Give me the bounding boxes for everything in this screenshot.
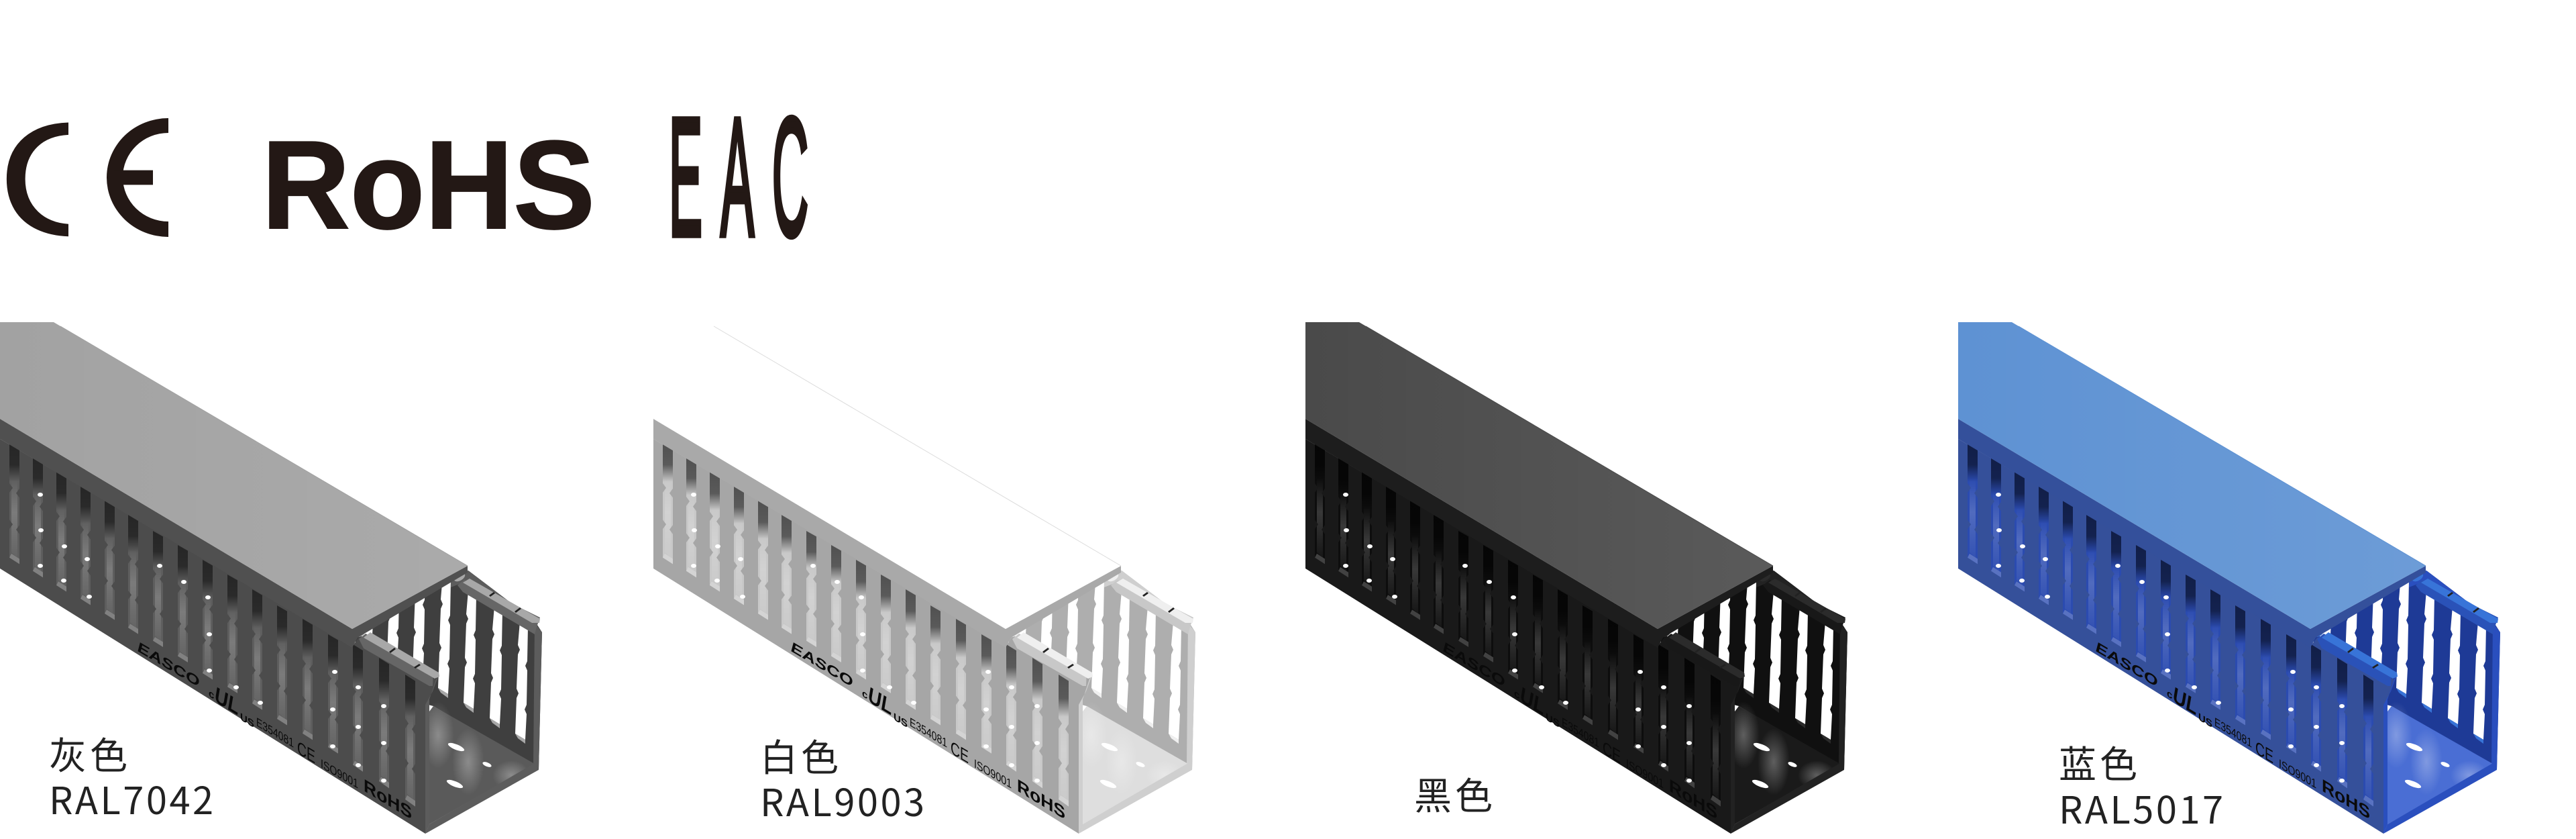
side wall markings: ISO9001 bbox=[321, 756, 358, 792]
side wall markings: CE bbox=[951, 738, 969, 768]
colour label: white: 白色 bbox=[760, 728, 842, 783]
duct interior and open end bbox=[1661, 530, 1847, 834]
colour label: black: 黑色 bbox=[1414, 767, 1496, 821]
side wall markings: EASCO bbox=[2096, 638, 2157, 691]
side wall markings: EASCO bbox=[791, 638, 853, 691]
side wall markings: EASCO bbox=[138, 638, 199, 691]
side wall markings bbox=[1443, 638, 1717, 824]
duct side wall with slots bbox=[0, 439, 540, 834]
logo: CE mark: C bbox=[0, 89, 138, 269]
logo: CE mark bbox=[7, 118, 168, 237]
product: grey wiring duct bbox=[0, 322, 542, 834]
side wall markings: c bbox=[1514, 687, 1519, 702]
side wall markings: UL bbox=[215, 681, 239, 721]
side wall markings: c bbox=[2167, 687, 2172, 702]
side wall markings bbox=[791, 638, 1065, 824]
colour label: white bbox=[760, 728, 927, 828]
side wall markings: CE bbox=[297, 738, 315, 768]
duct interior and open end bbox=[2314, 530, 2500, 834]
duct side wall with slots bbox=[653, 439, 1193, 834]
side wall markings: RoHS bbox=[2322, 775, 2370, 824]
side wall markings: UL bbox=[1520, 681, 1544, 721]
side wall markings: EASCO bbox=[1443, 638, 1505, 691]
certification logos bbox=[7, 114, 808, 240]
duct cover bbox=[1305, 322, 1773, 648]
side wall markings: E354081 bbox=[1562, 715, 1599, 751]
side wall markings bbox=[2096, 638, 2370, 824]
duct side wall with slots bbox=[1305, 439, 1845, 834]
side wall markings: US bbox=[1546, 711, 1560, 730]
side wall markings: UL bbox=[868, 681, 892, 721]
logo: EAC mark: EAC bbox=[669, 84, 808, 271]
colour label: grey: 灰色 bbox=[49, 726, 131, 781]
duct interior and open end bbox=[356, 530, 542, 834]
duct side wall with slots bbox=[1958, 439, 2498, 834]
colour label: blue bbox=[2059, 735, 2226, 835]
product: blue wiring duct bbox=[1958, 322, 2500, 835]
colour label: white: RAL9003 bbox=[760, 773, 927, 828]
side wall markings: US bbox=[2198, 711, 2212, 730]
side wall markings: c bbox=[862, 687, 867, 702]
duct cover bbox=[653, 322, 1121, 648]
side wall markings: E354081 bbox=[256, 715, 294, 751]
side wall markings: E354081 bbox=[2214, 715, 2252, 751]
logo: CE mark: E bbox=[42, 70, 171, 288]
product: black wiring duct bbox=[1305, 322, 1847, 834]
side wall markings: c bbox=[209, 687, 214, 702]
side wall markings: CE bbox=[1603, 738, 1621, 768]
side wall markings: RoHS bbox=[364, 775, 412, 824]
side wall markings: E354081 bbox=[910, 715, 947, 751]
logo: RoHS: RoHS bbox=[262, 115, 595, 255]
side wall markings: ISO9001 bbox=[2279, 756, 2316, 792]
side wall markings: CE bbox=[2255, 738, 2273, 768]
product: white wiring duct bbox=[653, 322, 1195, 834]
colour label: blue: RAL5017 bbox=[2059, 781, 2226, 835]
duct cover bbox=[0, 322, 468, 648]
side wall markings: ISO9001 bbox=[974, 756, 1012, 792]
duct interior and open end bbox=[1009, 530, 1195, 834]
side wall markings bbox=[138, 638, 412, 824]
side wall markings: RoHS bbox=[1017, 775, 1065, 824]
side wall markings: UL bbox=[2173, 681, 2197, 721]
colour label: grey bbox=[49, 726, 216, 826]
colour label: blue: 蓝色 bbox=[2059, 735, 2141, 789]
side wall markings: US bbox=[894, 711, 908, 730]
side wall markings: US bbox=[240, 711, 254, 730]
colour label: grey: RAL7042 bbox=[49, 771, 216, 826]
side wall markings: RoHS bbox=[1669, 775, 1717, 824]
side wall markings: ISO9001 bbox=[1626, 756, 1664, 792]
duct cover bbox=[1958, 322, 2426, 648]
